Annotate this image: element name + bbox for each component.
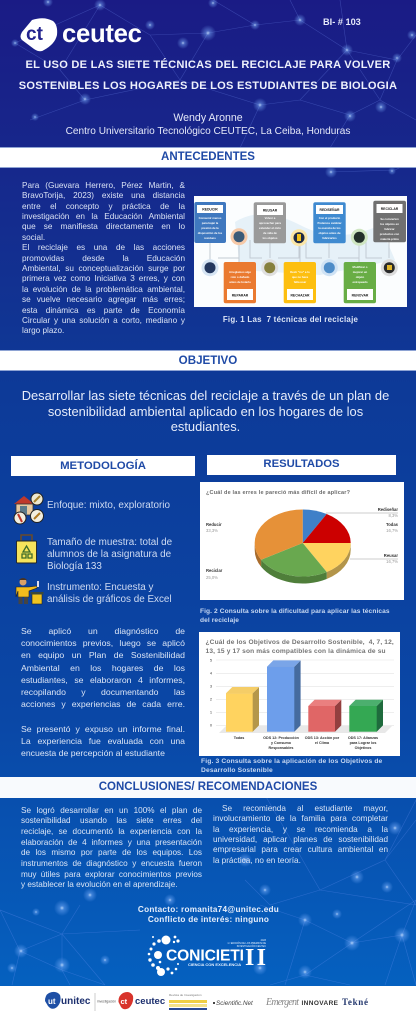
- text: instrumento: Instrumento: Encuesta y: [47, 582, 153, 593]
- box: reducir: REDUCIR: [202, 208, 218, 212]
- logo: conicieti II: 2023: [261, 939, 267, 942]
- heading: metodología: [11, 456, 195, 476]
- text block: conclusiones: muy útiles para explorar conocimientos previos: [21, 870, 202, 879]
- text block: antecedentes: entre el concepto y práctica de la: [22, 202, 185, 211]
- box: rediseñar: REDISEÑAR: [320, 207, 340, 212]
- text block: antecedentes: social.: [22, 233, 45, 242]
- text: tamaño de muestra: [47, 536, 172, 572]
- logo: scientific.net: Scientific.Net: [216, 1000, 253, 1007]
- box: renovar: Modificar o: [353, 265, 368, 269]
- box: reusar: [254, 202, 286, 243]
- author and affiliation: Centro Universitario Tecnológico CEUTEC, La Ceiba, Honduras: [66, 126, 350, 136]
- text: tamaño de muestra: Biología 133: [47, 561, 102, 572]
- box: reusar: los objetos: [263, 236, 278, 240]
- logo: conicieti II: II: [245, 945, 266, 971]
- logo: innovare: INNOVARE: [302, 1000, 339, 1007]
- bar labels: Responsables: [268, 746, 294, 750]
- heading: resultados: [207, 455, 396, 475]
- box: renovar: mejorar un: [353, 270, 368, 274]
- logo: ceutec: ceutec: [135, 996, 165, 1007]
- logo: ceutec: [20, 18, 142, 52]
- text block: conclusiones: y establecer la evolución en el aprendizaje.: [21, 880, 178, 889]
- logo: ceutec: ct: [120, 997, 128, 1006]
- pie labels: Reusar: [384, 553, 398, 558]
- text block: antecedentes: largo plazo.: [22, 326, 64, 335]
- footer logo strip: [0, 986, 416, 1024]
- box: reusar: aprovechar para: [259, 221, 281, 225]
- contact and conflict of interest: Contacto: romanita74@unitec.edu: [138, 905, 279, 914]
- box: reciclar: productos con: [380, 232, 399, 236]
- author and affiliation: [66, 112, 350, 136]
- box: rechazar: [284, 262, 316, 303]
- pie labels: Rediseñar: [378, 507, 398, 512]
- text block: recomendaciones: Se recomienda al estudiante mayor,: [222, 804, 388, 813]
- text block: antecedentes: esta dinámica es parte de Economía: [22, 306, 185, 315]
- caption: figure 2: del reciclaje: [200, 617, 239, 624]
- text block: antecedentes: Circular y una solución a corto, mediano y: [22, 316, 185, 325]
- box: renovar: [344, 262, 376, 303]
- logo: conicieti II: CONICIETI: [166, 948, 244, 964]
- logo: unitec: ut: [48, 997, 56, 1006]
- chart question: ¿Cuál de los Objetivos de Desarrollo Sostenible, 4, 7, 12,: [206, 639, 394, 646]
- text block: antecedentes: promovidas desde la Educación: [22, 254, 185, 263]
- text block: antecedentes: [22, 181, 186, 335]
- axis values: 0: [210, 722, 213, 728]
- logo: emergent: Emergent: [265, 997, 299, 1008]
- text block: metodología: en equipo un Plan de Sostenibilidad: [21, 650, 185, 660]
- logo: yellow journal: [169, 993, 207, 1010]
- caption: figure 3: Fig. 3 Consulta sobre la aplicación de los Objetivos de: [201, 758, 382, 764]
- box: reducir: residuos: [204, 236, 216, 240]
- pie labels: Reducir: [206, 522, 222, 527]
- text block: metodología: Ambiental en los hogares de los: [21, 663, 185, 673]
- box: reparar: roto o dañado: [231, 275, 250, 279]
- box: reparar: [224, 262, 256, 303]
- pie 3d sides: [255, 543, 351, 584]
- bars: [226, 660, 383, 732]
- box: rediseñar: la esencia de los: [318, 226, 341, 230]
- objective statement: sostenibilidad ambiental aplicado en los hogares de los: [48, 404, 363, 419]
- logo: ceutec: ceutec: [62, 20, 142, 48]
- text block: conclusiones: de los mismo por parte de los equipos. Los: [21, 848, 202, 857]
- box: renovar: objeto: [356, 275, 364, 279]
- box: reusar: extender el ciclo: [259, 226, 281, 230]
- figure 1: seven recycling techniques infographic: [194, 196, 407, 307]
- box: reciclar: los objetos en: [380, 222, 399, 226]
- box: reducir: presión de la: [201, 226, 219, 230]
- pie labels: 16,7%: [386, 559, 398, 564]
- chart question: ¿Cuál de las erres le pareció más difícil de aplicar?: [206, 490, 351, 496]
- logo: conicieti II: CIENCIA CON EXCELENCIA: [188, 962, 241, 967]
- contact and conflict of interest: Conflicto de interés: ninguno: [148, 915, 269, 924]
- bar labels: Objetivos: [355, 746, 371, 750]
- poster code: BI- # 103: [323, 17, 361, 27]
- pie labels: Reciclar: [206, 568, 223, 573]
- text block: metodología: acciones y experiencias de cada erre.: [21, 699, 185, 709]
- icon: house and tools: [14, 492, 44, 524]
- bar labels: ODS 12: Producción: [263, 736, 300, 740]
- text: tamaño de muestra: alumnos de la asignatura de: [47, 549, 171, 560]
- pie labels: Todas: [386, 522, 399, 527]
- text block: metodología: Se aplicó un diagnóstico de: [21, 626, 185, 636]
- box: rediseñar: Con el producto: [319, 216, 341, 220]
- text block: antecedentes: la evolución de la problemática ambiental,: [22, 285, 185, 294]
- contact and conflict of interest: [138, 905, 279, 924]
- text block: metodología: conocimientos previos, luego se aplicó: [21, 638, 185, 648]
- bar labels: el Clima: [315, 741, 330, 745]
- logo: ceutec: [118, 992, 165, 1009]
- heading: conclusiones / recomendaciones: CONCLUSIONES/ RECOMENDACIONES: [99, 781, 317, 793]
- box: reciclar: Se convierten: [380, 217, 399, 221]
- box: reducir: Consumir menos: [199, 216, 222, 220]
- text block: antecedentes: se vuelve necesario agregar más erres;: [22, 295, 185, 304]
- bar labels: ODS 13: Acción por: [305, 736, 340, 740]
- bar labels: [234, 736, 378, 750]
- text block: recomendaciones: la práctica, no en teoría.: [213, 856, 301, 865]
- box: renovar: estropeado: [352, 280, 368, 284]
- text block: metodología: [21, 626, 185, 758]
- heading: resultados: RESULTADOS: [263, 458, 340, 470]
- bar chart: sustainable development goals: [199, 632, 400, 756]
- axis values: 1: [210, 710, 213, 714]
- box: reciclar: materia prima: [380, 237, 399, 241]
- objective statement: [22, 388, 389, 434]
- box: rediseñar: Podemos cambiar: [317, 221, 342, 225]
- text block: antecedentes: que se manifiesta directamente en lo: [22, 222, 185, 231]
- title: EL USO DE LAS SIETE TÉCNICAS DEL RECICLAJE PARA VOLVER: [26, 59, 390, 71]
- title: SOSTENIBLES LOS HOGARES DE LOS ESTUDIANTES DE BIOLOGIA: [19, 80, 397, 92]
- box: reusar: de vida de: [263, 231, 277, 235]
- footer logo strip: investigación: [97, 1000, 116, 1004]
- text: tamaño de muestra: Tamaño de muestra: total de: [47, 536, 172, 548]
- axis values: 3: [210, 684, 213, 688]
- text block: antecedentes: El reciclaje es una de las acciones: [22, 243, 185, 252]
- text block: metodología: recopilando y documentando las: [21, 687, 185, 697]
- author and affiliation: Wendy Aronne: [173, 112, 243, 124]
- box: reducir: disposición de los: [198, 231, 223, 235]
- heading: antecedentes: ANTECEDENTES: [161, 151, 255, 163]
- text block: recomendaciones: [213, 804, 388, 865]
- pie chart: most difficult R: [200, 482, 404, 600]
- box: reciclar: RECICLAR: [381, 207, 399, 211]
- text block: conclusiones: instrumentos de diagnóstico y encuesta fueron: [21, 859, 202, 868]
- box: rediseñar: fabricarlos: [322, 236, 337, 240]
- box: reducir: [194, 202, 226, 243]
- caption: figure 3: [201, 758, 382, 774]
- box: reparar: antes de botarlo: [229, 280, 251, 284]
- box: rediseñar: objetos antes de: [318, 231, 341, 235]
- logo: yellow journal: Revista de Investigación: [169, 993, 202, 997]
- chart question: 13, 15 y 17 son más compatibles con la dinámica de su: [206, 648, 386, 655]
- axis values: 5: [210, 658, 213, 662]
- text block: recomendaciones: la experiencia, y se recomienda a la: [213, 825, 388, 834]
- axis values: 4: [210, 670, 213, 676]
- pie labels: 8,3%: [388, 513, 398, 518]
- pie labels: 33,3%: [206, 528, 218, 533]
- bar labels: y Consumo: [271, 741, 292, 745]
- caption: figure 2: [200, 608, 390, 624]
- heading: objetivo: [0, 350, 416, 371]
- axis values: 2: [210, 696, 213, 702]
- logo: tekné: Tekné: [342, 997, 368, 1007]
- text block: antecedentes: Ambiental, su conceptualización surge por: [22, 264, 185, 273]
- box: reciclar: [373, 201, 406, 242]
- pie labels: [206, 507, 399, 580]
- box: reusar: REUSAR: [263, 208, 278, 212]
- heading: antecedentes: [0, 147, 416, 168]
- logo: conicieti II: 1.ª EDICIÓN DE LOS PREMIOS DE: [227, 941, 266, 945]
- text block: conclusiones: reciclaje, se documentó la experiencia con la: [21, 827, 202, 836]
- text block: conclusiones: [21, 806, 202, 889]
- text block: antecedentes: Para (Guevara Herrero, Pérez Martin, &: [22, 181, 185, 190]
- box: rediseñar: [313, 202, 346, 243]
- box: reparar: REPARAR: [232, 293, 249, 297]
- text block: metodología: La experiencia fue evaluada con una: [21, 736, 185, 746]
- text: enfoque: Enfoque: mixto, exploratorio: [47, 500, 170, 511]
- logo: conicieti II: [148, 936, 267, 976]
- caption: figure 3: Desarrollo Sostenible: [201, 767, 273, 774]
- box: reusar: Volver a: [265, 216, 276, 220]
- title: [19, 58, 397, 92]
- box: rechazar: que no hace: [292, 275, 309, 279]
- text block: conclusiones: sostenibilidad usando las siete erres del: [21, 816, 202, 825]
- box: rechazar: RECHAZAR: [290, 293, 310, 297]
- caption: figure 1: Fig. 1 Las 7 técnicas del reciclaje: [223, 315, 358, 324]
- text block: conclusiones: elaboración de 4 informes y una presentación: [21, 838, 202, 847]
- icon circles: [202, 228, 398, 276]
- heading: objetivo: OBJETIVO: [179, 354, 237, 367]
- text block: antecedentes: BravoTorija, 2023) existe una distancia: [22, 191, 185, 200]
- box: renovar: RENOVAR: [352, 293, 369, 297]
- logo: ceutec: ct: [26, 24, 44, 45]
- text block: antecedentes: investigación en la Educación Ambiental: [22, 212, 185, 221]
- text block: recomendaciones: universidad, aplicar planes de sostenibilidad: [213, 835, 388, 844]
- pie slices: [255, 510, 351, 577]
- text block: conclusiones: Se logró desarrollar en un 100% el plan de: [21, 806, 202, 815]
- text block: recomendaciones: involucramiento de la familia para completar: [213, 814, 388, 823]
- text block: antecedentes: primera vez como Iniciativa 3 erres, y con: [22, 274, 185, 283]
- icon: recycling bag: [16, 534, 37, 564]
- text: instrumento: [47, 582, 172, 605]
- box: reciclar: fabricar: [384, 227, 396, 231]
- pie labels: 25,0%: [206, 575, 218, 580]
- logo: unitec: unitec: [61, 996, 91, 1007]
- text block: recomendaciones: empresarial para crear cultura ambiental en: [213, 845, 388, 854]
- logo: conicieti II: INVESTIGACIÓN CEUTEC: [237, 945, 266, 948]
- pie labels: 16,7%: [386, 528, 398, 533]
- heading: metodología: METODOLOGÍA: [60, 460, 146, 472]
- box: reducir: para bajar la: [202, 221, 219, 225]
- caption: figure 2: Fig. 2 Consulta sobre la dificultad para aplicar las técnicas: [200, 608, 390, 615]
- bar labels: para Lograr los: [350, 741, 376, 745]
- box: reparar: Arreglamos algo: [229, 270, 251, 274]
- text: instrumento: análisis de gráficos de Excel: [47, 594, 172, 605]
- text block: metodología: encuesta de percepción al estudiante: [21, 748, 165, 758]
- objective statement: Desarrollar las siete técnicas del reciclaje a través de un plan de: [22, 388, 389, 403]
- logo: unitec: [45, 992, 91, 1009]
- box: rechazar: falta usar: [294, 280, 307, 284]
- text block: metodología: Se presentó y expuso un informe final.: [21, 724, 185, 734]
- box: rechazar: Decir "no" a lo: [290, 270, 310, 274]
- bar labels: ODS 17: Alianzas: [348, 736, 378, 740]
- heading: conclusiones / recomendaciones: [0, 777, 416, 798]
- text block: metodología: estudiantes, se elaboraron 4 informes,: [21, 675, 185, 685]
- icon: person recycling: [16, 578, 44, 604]
- bar labels: Todas: [234, 736, 244, 740]
- objective statement: estudiantes.: [171, 419, 240, 434]
- axis values: [210, 658, 213, 728]
